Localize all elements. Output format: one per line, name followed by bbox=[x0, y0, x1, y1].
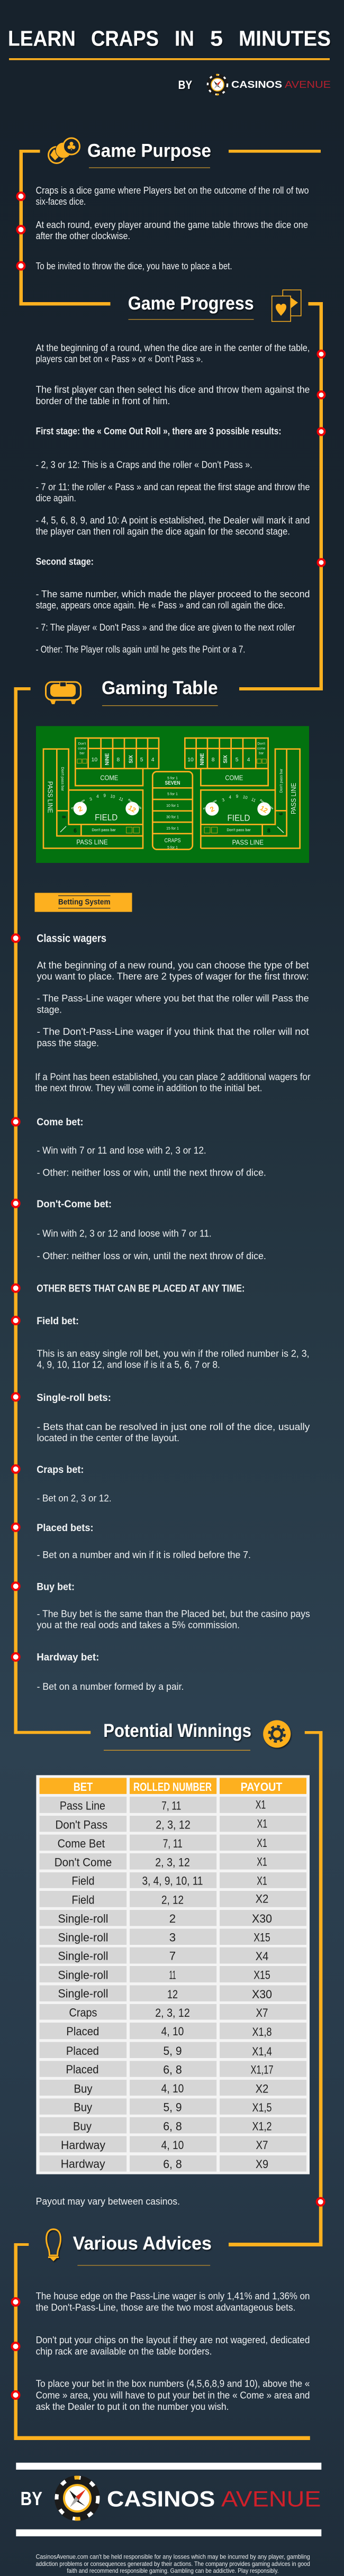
panel: game purpose bbox=[17, 138, 321, 306]
right layout: NINE bbox=[200, 753, 205, 766]
betting system text: If a Point has been established, you can place 2 additional wagers for bbox=[35, 1071, 311, 1082]
left layout: SIX bbox=[128, 755, 134, 763]
table rows: X2 bbox=[256, 2082, 268, 2095]
text block: the player can then roll again the dice again for the second stage. bbox=[36, 526, 290, 536]
betting system text: the next throw. They will come in addition to the initial bet. bbox=[35, 1082, 262, 1093]
left layout: Don't bbox=[78, 742, 86, 746]
text block: - 2, 3 or 12: This is a Craps and the roller « Don't Pass ». bbox=[36, 460, 252, 470]
heading: Game Progress bbox=[128, 293, 254, 314]
table rows: X1,17 bbox=[251, 2063, 273, 2076]
table rows: X4 bbox=[256, 1950, 268, 1963]
text block bbox=[36, 342, 310, 655]
text block: - 7 or 11: the roller « Pass » and can repeat the first stage and throw the bbox=[36, 481, 310, 492]
betting system text: Don't-Come bet: bbox=[37, 1199, 112, 1210]
left layout: 11 bbox=[118, 796, 124, 803]
table rows: X1 bbox=[257, 1855, 267, 1869]
text block: Come » area, you will have to put your bet in the « Come » area and bbox=[36, 2390, 310, 2400]
text block: six-faces dice. bbox=[36, 196, 86, 207]
table rows: Don't Pass bbox=[55, 1818, 107, 1832]
betting system text: Come bet: bbox=[37, 1117, 84, 1128]
left layout: 3 bbox=[89, 796, 93, 802]
right layout: 11 bbox=[250, 797, 257, 803]
table rows: Craps bbox=[69, 2006, 97, 2019]
left layout: 12 bbox=[127, 804, 137, 814]
betting system text bbox=[35, 933, 311, 1692]
table rows: 6, 8 bbox=[163, 2063, 182, 2076]
table rows: X15 bbox=[254, 1968, 270, 1982]
logo wordmark: AVENUE bbox=[221, 2487, 321, 2511]
right layout bbox=[185, 738, 300, 848]
text block: the Don't-Pass-Line, those are the two most advantageous bets. bbox=[36, 2302, 295, 2313]
table felt bbox=[36, 726, 309, 863]
footer logo band bbox=[16, 2463, 321, 2536]
table rows: Hardway bbox=[61, 2138, 106, 2152]
table rows: X1,8 bbox=[252, 2025, 272, 2038]
betting system text: Hardway bet: bbox=[37, 1652, 99, 1663]
left layout: 2 bbox=[77, 804, 84, 813]
table rows: Come Bet bbox=[58, 1837, 105, 1850]
table rows: Hardway bbox=[61, 2158, 105, 2170]
table rows: X2 bbox=[256, 1892, 268, 1906]
frame bbox=[229, 1731, 322, 2246]
left layout: 9 bbox=[103, 793, 106, 798]
title: MINUTES bbox=[239, 26, 331, 50]
text block: players can bet on « Pass » or « Don't Pass ». bbox=[36, 353, 203, 364]
by label: BY bbox=[178, 78, 192, 92]
by label: BY bbox=[21, 2488, 42, 2509]
table rows: X30 bbox=[252, 1912, 272, 1925]
table rows: X1 bbox=[257, 1836, 267, 1850]
panel: game progress bbox=[36, 290, 325, 690]
betting system label: Betting System bbox=[58, 898, 110, 907]
center proposition bets bbox=[152, 771, 193, 850]
table rows: 5, 9 bbox=[163, 2044, 182, 2058]
heading: Various Advices bbox=[73, 2233, 212, 2254]
disclaimer bbox=[36, 2553, 310, 2574]
table rows: X1 bbox=[257, 1874, 267, 1888]
text block bbox=[36, 2291, 310, 2412]
betting system text: - Bet on a number formed by a pair. bbox=[37, 1681, 184, 1692]
left layout: 5 bbox=[140, 757, 143, 763]
title: LEARN bbox=[8, 26, 76, 50]
right layout: 10 bbox=[187, 757, 194, 763]
left layout: PASS LINE bbox=[76, 839, 108, 846]
icon: logo chip bbox=[55, 2475, 100, 2521]
table rows: 3, 4, 9, 10, 11 bbox=[142, 1874, 203, 1888]
center proposition bets: SEVEN bbox=[165, 780, 180, 786]
right layout: Don't pass bar bbox=[279, 768, 284, 793]
left layout: 8 bbox=[61, 816, 66, 818]
betting system text: - Bet on 2, 3 or 12. bbox=[37, 1493, 112, 1504]
left layout: Don't pass bar bbox=[92, 827, 116, 832]
heading: Gaming Table bbox=[102, 678, 218, 698]
right layout: PASS LINE bbox=[290, 783, 297, 814]
text block: stage, appears once again. He « Pass » and can roll again the dice. bbox=[36, 600, 285, 611]
table rows: Placed bbox=[66, 2044, 99, 2058]
frame bbox=[19, 150, 321, 306]
logo wordmark bbox=[107, 2487, 321, 2511]
frame bbox=[14, 687, 90, 1734]
table rows: Field bbox=[72, 1893, 94, 1907]
table rows: 5, 9 bbox=[163, 2100, 182, 2114]
right layout: Don't bbox=[257, 742, 265, 746]
text block: To be invited to throw the dice, you have to place a bet. bbox=[36, 261, 232, 271]
table rows: 4, 10 bbox=[161, 2025, 184, 2038]
betting system text: pass the stage. bbox=[37, 1037, 99, 1048]
table rows: X1 bbox=[256, 1798, 266, 1812]
left layout: Pays Double bbox=[71, 799, 86, 811]
table rows: Single-roll bbox=[58, 1968, 108, 1982]
table rows: X1,5 bbox=[252, 2101, 272, 2114]
left layout bbox=[43, 738, 159, 848]
right layout: bar bbox=[259, 752, 264, 755]
table rows: X1 bbox=[257, 1817, 267, 1831]
table rows: X9 bbox=[256, 2158, 268, 2171]
table rows: Single-roll bbox=[58, 1987, 108, 2000]
text block: At each round, every player around the game table throws the dice one bbox=[36, 220, 308, 230]
text block: The first player can then select his dice and throw them against the bbox=[36, 385, 310, 395]
icon: chips bbox=[49, 138, 79, 163]
text block: chip rack are available on the table borders. bbox=[36, 2346, 212, 2357]
text block: border of the table in front of him. bbox=[36, 396, 170, 406]
left layout: 10 bbox=[92, 757, 97, 763]
table rows: Placed bbox=[66, 2063, 98, 2076]
right layout: SIX bbox=[223, 755, 229, 763]
table rows: 12 bbox=[167, 1988, 178, 2001]
table rows: 3 bbox=[169, 1931, 176, 1944]
betting system text: Placed bets: bbox=[37, 1523, 94, 1534]
text block: - Other: The Player rolls again until he gets the Point or a 7. bbox=[36, 644, 245, 655]
text block: ask the Dealer to put it on the number you wish. bbox=[36, 2401, 229, 2412]
table rows: Single-roll bbox=[58, 1949, 108, 1963]
table header bbox=[40, 1778, 306, 1794]
betting system text: - The Buy bet is the same than the Placed bet, but the casino pays bbox=[37, 1608, 310, 1619]
text block: First stage: the « Come Out Roll », there are 3 possible results: bbox=[36, 426, 281, 436]
betting system text: - The Pass-Line wager where you bet that the roller will Pass the bbox=[37, 993, 309, 1004]
betting system text: you want to place. There are 2 types of wager for the first throw: bbox=[37, 971, 309, 982]
heading underline bbox=[104, 1750, 250, 1751]
title: 5 bbox=[210, 26, 223, 50]
betting system text: - Win with 2, 3 or 12 and loose with 7 or 11. bbox=[37, 1228, 212, 1239]
text block: To place your bet in the box numbers (4,5,6,8,9 and 10), above the « bbox=[36, 2379, 310, 2389]
left layout: bar bbox=[79, 752, 85, 755]
betting system text: - The Don't-Pass-Line wager if you think that the roller will not bbox=[37, 1026, 309, 1037]
right layout: Pays Double bbox=[203, 799, 218, 811]
center proposition bets: 30 for 1 bbox=[166, 816, 179, 819]
title: IN bbox=[175, 26, 194, 50]
heading: Potential Winnings bbox=[103, 1721, 251, 1741]
left layout: NINE bbox=[104, 753, 110, 766]
text block: The house edge on the Pass-Line wager is only 1,41% and 1,36% on bbox=[36, 2291, 310, 2301]
left layout: Pays Double bbox=[128, 798, 142, 810]
icon: table bbox=[46, 682, 80, 704]
betting system text: stage. bbox=[37, 1004, 62, 1015]
table rows: Buy bbox=[74, 2100, 93, 2114]
table rows: Don't Come bbox=[55, 1856, 112, 1869]
timeline marker bbox=[317, 2198, 324, 2206]
heading underline bbox=[102, 705, 218, 706]
text block: - 4, 5, 6, 8, 9, and 10: A point is established, the Dealer will mark it and bbox=[36, 515, 310, 525]
panel: various advices bbox=[12, 2229, 310, 2440]
icon: logo chip bbox=[206, 74, 229, 96]
text block bbox=[36, 185, 309, 271]
table rows: Single-roll bbox=[58, 1931, 108, 1944]
right layout: 5 bbox=[236, 757, 239, 763]
timeline markers bbox=[17, 193, 24, 270]
table header: ROLLED NUMBER bbox=[133, 1780, 212, 1794]
table rows: X7 bbox=[256, 2138, 268, 2152]
left layout: PASS LINE bbox=[47, 781, 54, 813]
right layout: 8 bbox=[267, 827, 270, 834]
table rows: Buy bbox=[73, 2119, 92, 2133]
betting system text: Single-roll bets: bbox=[37, 1392, 111, 1404]
left layout: 4 bbox=[96, 794, 99, 799]
right layout: FIELD bbox=[227, 813, 250, 823]
table rows: 2, 3, 12 bbox=[156, 1818, 191, 1832]
right layout: Pays Double bbox=[259, 799, 274, 811]
heading underline bbox=[128, 319, 254, 320]
betting system text: This is an easy single roll bet, you win if the rolled number is 2, 3, bbox=[37, 1348, 310, 1359]
text block: Second stage: bbox=[36, 556, 94, 567]
timeline markers bbox=[12, 934, 20, 1661]
table rows: Buy bbox=[74, 2082, 93, 2095]
table rows: 4, 10 bbox=[161, 2082, 184, 2095]
betting system text: Classic wagers bbox=[37, 933, 106, 945]
payout note: Payout may vary between casinos. bbox=[36, 2196, 180, 2207]
betting system text: you at the real oods and takes a 5% commission. bbox=[37, 1619, 240, 1630]
logo wordmark bbox=[231, 79, 331, 90]
byline: Casinos Avenue bbox=[178, 74, 331, 96]
table rows: Field bbox=[72, 1874, 94, 1888]
betting system text: At the beginning of a new round, you can choose the type of bet bbox=[37, 960, 309, 970]
right layout: 10 bbox=[242, 795, 248, 800]
betting system label bbox=[35, 893, 132, 912]
betting system text: - Win with 7 or 11 and lose with 2, 3 or 12. bbox=[37, 1145, 206, 1155]
logo wordmark: CASINOS bbox=[107, 2487, 215, 2511]
center proposition bets: CRAPS bbox=[164, 838, 181, 844]
text block: - 7: The player « Don't Pass » and the dice are given to the next roller bbox=[36, 622, 295, 633]
table rows: Pass Line bbox=[60, 1799, 105, 1813]
betting system text: - Other: neither loss or win, until the next throw of dice. bbox=[37, 1251, 266, 1261]
text block: Craps is a dice game where Players bet on the outcome of the roll of two bbox=[36, 185, 309, 196]
right layout: PASS LINE bbox=[232, 839, 264, 846]
heading underline bbox=[89, 167, 210, 168]
disclaimer: faith and recommend responsible gaming. Gambling can be addictive. Play responsibly. bbox=[67, 2567, 279, 2574]
panel: potential winnings bbox=[36, 1720, 324, 2246]
table rows: X1,4 bbox=[252, 2045, 272, 2058]
text block: Don't put your chips on the layout if they are not wagered, dedicated bbox=[36, 2335, 310, 2345]
table rows: 2, 12 bbox=[161, 1893, 184, 1907]
table rows: 4, 10 bbox=[161, 2138, 184, 2152]
betting system text: Craps bet: bbox=[37, 1464, 84, 1476]
left layout: come bbox=[78, 747, 86, 751]
frame bbox=[14, 2243, 310, 2440]
table rows: 11 bbox=[169, 1968, 176, 1982]
betting system text: 4, 9, 10, 11or 12, and lose if is it a 5, 6, 7 or 8. bbox=[37, 1359, 220, 1370]
disclaimer: CasinosAvenue.com can't be held responsible for any losses which may be incurred by any player, gambling bbox=[36, 2553, 310, 2561]
right layout: 12 bbox=[259, 804, 269, 814]
text block: dice again. bbox=[36, 493, 76, 504]
center proposition bets: 15 for 1 bbox=[166, 827, 179, 831]
right layout: 4 bbox=[247, 757, 250, 763]
left layout: COME bbox=[100, 775, 118, 782]
table rows bbox=[40, 1797, 306, 2172]
table rows: X1,2 bbox=[252, 2119, 272, 2133]
table rows: 2, 3, 12 bbox=[155, 1856, 190, 1869]
title bbox=[8, 26, 331, 50]
frame bbox=[239, 302, 323, 690]
table rows: 6, 8 bbox=[163, 2158, 182, 2171]
panel: gaming table bbox=[12, 678, 311, 1734]
logo wordmark: CASINOS bbox=[231, 79, 282, 90]
icon: light bulb bbox=[47, 2229, 60, 2261]
table rows: 2 bbox=[169, 1912, 176, 1925]
right layout: 3 bbox=[221, 797, 225, 803]
right layout: come bbox=[257, 747, 266, 751]
table header: BET bbox=[74, 1780, 93, 1794]
betting system text: Buy bet: bbox=[37, 1582, 75, 1593]
table rows: Single-roll bbox=[58, 1912, 108, 1925]
table rows: X15 bbox=[254, 1931, 270, 1944]
heading: Game Purpose bbox=[87, 140, 211, 161]
table rows: 6, 8 bbox=[163, 2119, 182, 2133]
left layout: 8 bbox=[116, 757, 120, 763]
right layout: COME bbox=[225, 775, 243, 782]
right layout: 2 bbox=[209, 805, 215, 814]
betting system text: located in the center of the layout. bbox=[37, 1433, 179, 1443]
right layout: Don't pass bar bbox=[227, 827, 251, 832]
center proposition bets: 5 for 1 bbox=[167, 846, 178, 850]
disclaimer: addiction problems or consequences generated by their actions. The company provides gaming advices in good bbox=[36, 2560, 310, 2568]
icon: chips: ♣ bbox=[66, 140, 77, 153]
left layout: 4 bbox=[151, 757, 155, 763]
center proposition bets: 10 for 1 bbox=[166, 804, 179, 808]
timeline markers bbox=[318, 351, 325, 566]
table rows: X7 bbox=[256, 2006, 268, 2019]
text block: At the beginning of a round, when the dice are in the center of the table, bbox=[36, 342, 310, 353]
text block: after the other clockwise. bbox=[36, 231, 130, 241]
icon: playing cards bbox=[272, 290, 301, 322]
title underline bbox=[9, 58, 330, 60]
betting system text: Field bet: bbox=[37, 1316, 79, 1327]
right layout: 8 bbox=[212, 757, 215, 763]
right layout: 9 bbox=[236, 794, 239, 799]
left layout: FIELD bbox=[95, 812, 117, 822]
betting system text: - Other: neither loss or win, until the next throw of dice. bbox=[37, 1167, 266, 1178]
betting system text: OTHER BETS THAT CAN BE PLACED AT ANY TIME: bbox=[37, 1284, 245, 1294]
payout table bbox=[36, 1775, 310, 2174]
left layout: Don't pass bar bbox=[60, 767, 65, 791]
left layout: 6 bbox=[74, 827, 77, 834]
center proposition bets: 5 for 1 bbox=[167, 793, 178, 796]
left layout: 10 bbox=[110, 794, 116, 799]
center proposition bets: 5 for 1 bbox=[167, 777, 178, 780]
betting system text: - Bet on a number and win if it is rolled before the 7. bbox=[37, 1550, 251, 1560]
right layout: 6 bbox=[278, 813, 284, 815]
text block: - The same number, which made the player proceed to the second bbox=[36, 589, 310, 599]
table rows: 2, 3, 12 bbox=[155, 2006, 190, 2019]
icon: gear bbox=[263, 1720, 291, 1747]
table header: PAYOUT bbox=[241, 1780, 283, 1794]
right layout: 4 bbox=[229, 795, 231, 800]
table rows: 7, 11 bbox=[161, 1799, 181, 1813]
timeline markers bbox=[12, 2298, 19, 2399]
betting system text: - Bets that can be resolved in just one roll of the dice, usually bbox=[37, 1422, 310, 1432]
logo wordmark: AVENUE bbox=[285, 79, 331, 90]
title: CRAPS bbox=[91, 26, 159, 50]
table rows: Placed bbox=[66, 2025, 99, 2038]
craps table diagram bbox=[36, 726, 309, 863]
table rows: 7, 11 bbox=[163, 1837, 183, 1850]
table rows: X30 bbox=[252, 1988, 272, 2001]
table rows: 7 bbox=[169, 1949, 176, 1963]
